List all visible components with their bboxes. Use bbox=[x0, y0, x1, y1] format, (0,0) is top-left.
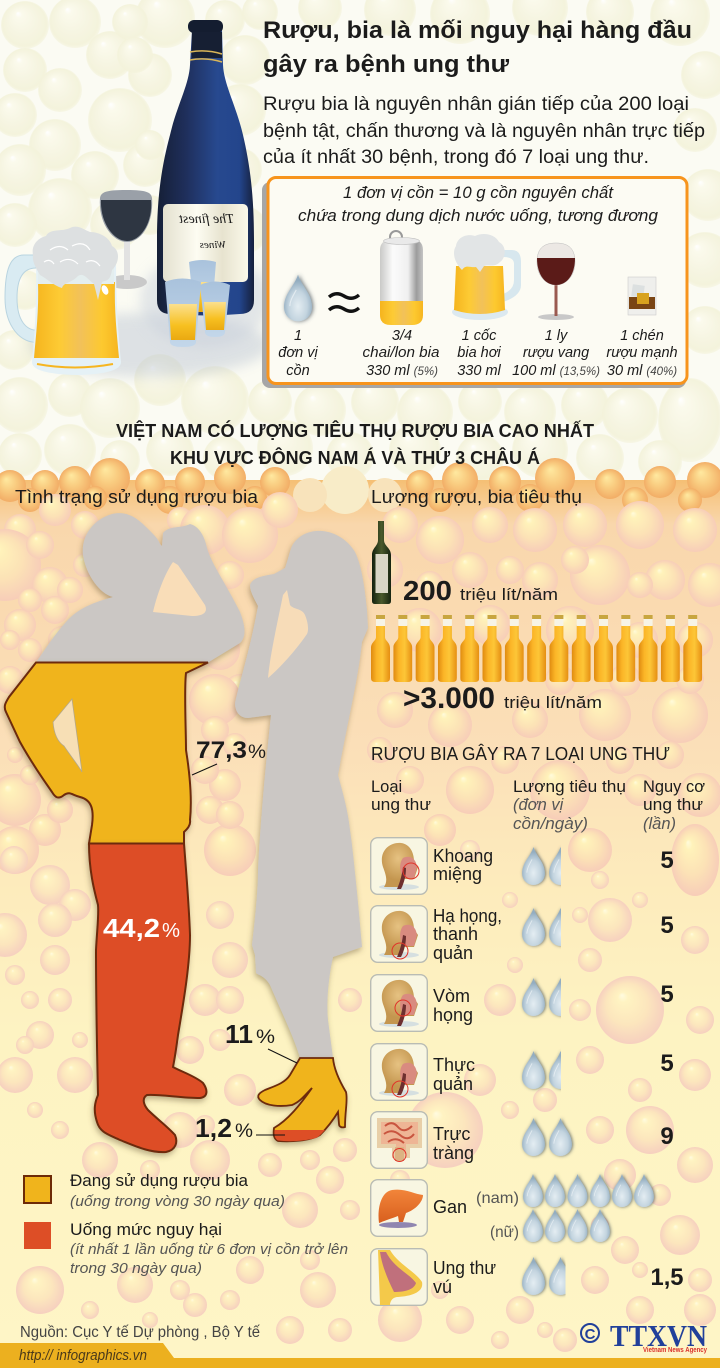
stat: beer volume: >3.000 bbox=[403, 682, 495, 715]
logo: TTXVN: Vietnam News Agency bbox=[643, 1347, 707, 1354]
icon: whisky glass bbox=[628, 277, 656, 315]
heading: Vietnam consumption: VIỆT NAM CÓ LƯỢNG TIÊU THỤ RƯỢU BIA CAO NHẤT bbox=[116, 420, 595, 441]
row: nasopharynx bbox=[371, 975, 674, 1031]
labels: unit equivalents: 1 bbox=[294, 328, 302, 344]
table header: Nguy cơ bbox=[643, 778, 705, 796]
row: breast: Ung thư bbox=[433, 1258, 496, 1278]
wine bottle: The finest bbox=[178, 212, 234, 227]
icon: approximately equal bbox=[329, 294, 359, 311]
row: liver: (nam) bbox=[476, 1190, 519, 1207]
row: liver: Gan bbox=[433, 1197, 467, 1217]
callout: 1.2%: 1,2 bbox=[195, 1113, 232, 1143]
legend: Uống mức nguy hại bbox=[70, 1220, 222, 1239]
icon: intestine bbox=[371, 1112, 427, 1168]
legend: (ít nhất 1 lần uống từ 6 đơn vị cồn trở lên bbox=[70, 1242, 348, 1258]
legend: trong 30 ngày qua) bbox=[70, 1261, 202, 1277]
row: esophagus bbox=[371, 1044, 674, 1100]
row: oral cavity: 5 bbox=[660, 847, 674, 874]
callout: 77.3%: % bbox=[248, 742, 266, 763]
legend: Đang sử dụng rượu bia bbox=[70, 1171, 249, 1190]
source: Nguồn: Cục Y tế Dự phòng , Bộ Y tế bbox=[20, 1324, 260, 1341]
icon: alcohol drop bbox=[284, 275, 312, 321]
beer mug bbox=[5, 227, 121, 375]
heading: consumption volume: Lượng rượu, bia tiêu thụ bbox=[371, 487, 582, 507]
icon: wine glass small bbox=[537, 243, 575, 320]
row: rectum: tràng bbox=[433, 1143, 474, 1163]
icon: esophagus bbox=[371, 1044, 427, 1100]
background: pale foam bubbles bbox=[0, 0, 720, 520]
panel heading: 1 đơn vị cồn = 10 g cồn nguyên chất bbox=[343, 183, 614, 202]
silhouette upper body bbox=[36, 513, 244, 662]
callout: 44.2% bbox=[103, 913, 180, 943]
footer band: http:// infographics.vn bbox=[19, 1348, 147, 1364]
stat: wine volume: 200 bbox=[403, 575, 452, 606]
labels: unit equivalents: chai/lon bia bbox=[362, 345, 440, 361]
row: hypopharynx, larynx bbox=[371, 906, 674, 963]
icon: mouth bbox=[371, 838, 427, 894]
row: rectum: 9 bbox=[660, 1123, 674, 1150]
labels: unit equivalents bbox=[278, 328, 678, 379]
logo: TTXVN: C bbox=[585, 1326, 596, 1343]
wine bottle: Wines bbox=[200, 239, 226, 251]
labels: unit equivalents: bia hơi bbox=[457, 345, 501, 361]
shot glasses bbox=[165, 260, 230, 347]
table header bbox=[371, 778, 705, 833]
labels: unit equivalents: 330 ml (5%) bbox=[366, 363, 438, 379]
labels: unit equivalents: 330 ml bbox=[457, 363, 502, 379]
row: hypopharynx, larynx: Hạ họng, bbox=[433, 906, 502, 926]
table header: (đơn vị bbox=[513, 796, 565, 814]
stat: beer volume bbox=[403, 682, 602, 715]
row: hypopharynx, larynx: thanh bbox=[433, 924, 478, 944]
labels: unit equivalents: 1 ly bbox=[545, 328, 568, 344]
row: esophagus: Thực bbox=[433, 1055, 475, 1075]
legend bbox=[24, 1171, 348, 1277]
row: nasopharynx: 5 bbox=[660, 981, 674, 1008]
table header: (lần) bbox=[643, 815, 676, 833]
labels: unit equivalents: 100 ml (13,5%) bbox=[512, 363, 600, 379]
labels: unit equivalents: 30 ml (40%) bbox=[607, 363, 677, 379]
intro paragraph: của ít nhất 30 bệnh, trong đó 7 loại ung thư. bbox=[263, 147, 649, 168]
labels: unit equivalents: 1 cốc bbox=[462, 328, 497, 344]
callout: 11% bbox=[225, 1019, 297, 1063]
background: beer bubbles bbox=[0, 458, 720, 1368]
stat: wine volume bbox=[403, 575, 558, 606]
row: nasopharynx: họng bbox=[433, 1005, 473, 1025]
heading: Vietnam consumption bbox=[116, 420, 595, 468]
arm opening bbox=[153, 562, 206, 616]
chart: female silhouette bbox=[235, 531, 368, 1141]
callout: 77.3%: 77,3 bbox=[196, 737, 247, 764]
labels: unit equivalents: rượu mạnh bbox=[606, 345, 678, 361]
icon: breast bbox=[371, 1249, 427, 1305]
chart: male silhouette bbox=[5, 513, 245, 1152]
labels: unit equivalents: đơn vị bbox=[278, 345, 318, 361]
panel: alcohol unit equivalents bbox=[262, 178, 687, 388]
callout: 11%: % bbox=[256, 1027, 275, 1048]
table header: ung thư bbox=[371, 796, 431, 814]
icon: nasopharynx bbox=[371, 975, 427, 1031]
wine glass bbox=[100, 190, 152, 289]
labels: unit equivalents: 1 chén bbox=[620, 328, 664, 344]
yellow section bbox=[5, 662, 208, 844]
callout: 44.2%: 44,2 bbox=[103, 913, 160, 943]
labels: unit equivalents: rượu vang bbox=[523, 345, 589, 361]
title: Rượu, bia là mối nguy hại hàng đầu bbox=[263, 17, 692, 44]
intro paragraph bbox=[263, 94, 705, 168]
row: breast: vú bbox=[433, 1277, 452, 1297]
row: oral cavity bbox=[371, 838, 674, 894]
arm gap bbox=[53, 699, 82, 772]
intro paragraph: Rượu bia là nguyên nhân gián tiếp của 200 loại bbox=[263, 94, 689, 115]
row: esophagus: 5 bbox=[660, 1050, 674, 1077]
callout: 1.2%: % bbox=[235, 1121, 253, 1142]
row: hypopharynx, larynx: 5 bbox=[660, 912, 674, 939]
row: oral cavity: Khoang bbox=[433, 846, 493, 866]
heading: Vietnam consumption: KHU VỰC ĐÔNG NAM Á VÀ THỨ 3 CHÂU Á bbox=[170, 447, 540, 468]
logo: TTXVN bbox=[581, 1318, 707, 1354]
table header: Lượng tiêu thụ bbox=[513, 778, 626, 796]
intro paragraph: bệnh tật, chấn thương và là nguyên nhân trực tiếp bbox=[263, 121, 705, 142]
callout: 44.2%: % bbox=[162, 920, 180, 942]
row: breast bbox=[371, 1249, 684, 1305]
table header: Loại bbox=[371, 778, 402, 796]
row: oral cavity: miệng bbox=[433, 864, 482, 884]
wine bottle bbox=[157, 20, 254, 316]
arm opening bbox=[268, 590, 308, 678]
row: liver bbox=[371, 1174, 654, 1242]
title: gây ra bệnh ung thư bbox=[263, 51, 510, 78]
row: rectum bbox=[371, 1112, 674, 1168]
panel heading: chứa trong dung dịch nước uống, tương đương bbox=[298, 206, 659, 225]
icon: beer mug small bbox=[452, 234, 521, 320]
red sole: 1.2% bbox=[274, 1130, 325, 1141]
yellow boot: 11% bbox=[258, 1058, 347, 1141]
icon: liver bbox=[371, 1180, 427, 1236]
panel heading bbox=[298, 183, 659, 225]
red section: 44.2% bbox=[89, 844, 206, 1152]
stat: beer volume: triệu lít/năm bbox=[504, 694, 602, 712]
callout: 77.3% bbox=[192, 737, 266, 775]
labels: unit equivalents: cồn bbox=[286, 363, 310, 379]
row: esophagus: quản bbox=[433, 1074, 473, 1094]
legend: (uống trong vòng 30 ngày qua) bbox=[70, 1194, 285, 1210]
row: breast: 1,5 bbox=[650, 1264, 684, 1291]
table header: cồn/ngày) bbox=[513, 815, 588, 833]
labels: unit equivalents: 3/4 bbox=[392, 328, 412, 344]
heading: 7 cancers: RƯỢU BIA GÂY RA 7 LOẠI UNG THƯ bbox=[371, 743, 670, 764]
row: hypopharynx, larynx: quản bbox=[433, 943, 473, 963]
icon row: 15 beer bottles bbox=[371, 615, 702, 682]
icon: beer can bbox=[380, 231, 423, 325]
row: nasopharynx: Vòm bbox=[433, 986, 470, 1006]
heading: usage status: Tình trạng sử dụng rượu bia bbox=[15, 487, 259, 507]
row: rectum: Trực bbox=[433, 1124, 470, 1144]
stat: wine volume: triệu lít/năm bbox=[460, 586, 558, 604]
callout: 11%: 11 bbox=[225, 1019, 253, 1049]
icon: wine bottle 200 bbox=[372, 521, 391, 604]
table header: ung thư bbox=[643, 796, 703, 814]
illustration: wine bottle, glasses and beer mug bbox=[5, 20, 270, 377]
title bbox=[263, 17, 692, 78]
callout: 1.2% bbox=[195, 1113, 285, 1143]
footer band bbox=[0, 1343, 720, 1368]
row: liver: (nữ) bbox=[490, 1224, 519, 1241]
logo: TTXVN: TTXVN bbox=[610, 1318, 707, 1353]
icon: throat bbox=[371, 906, 427, 962]
